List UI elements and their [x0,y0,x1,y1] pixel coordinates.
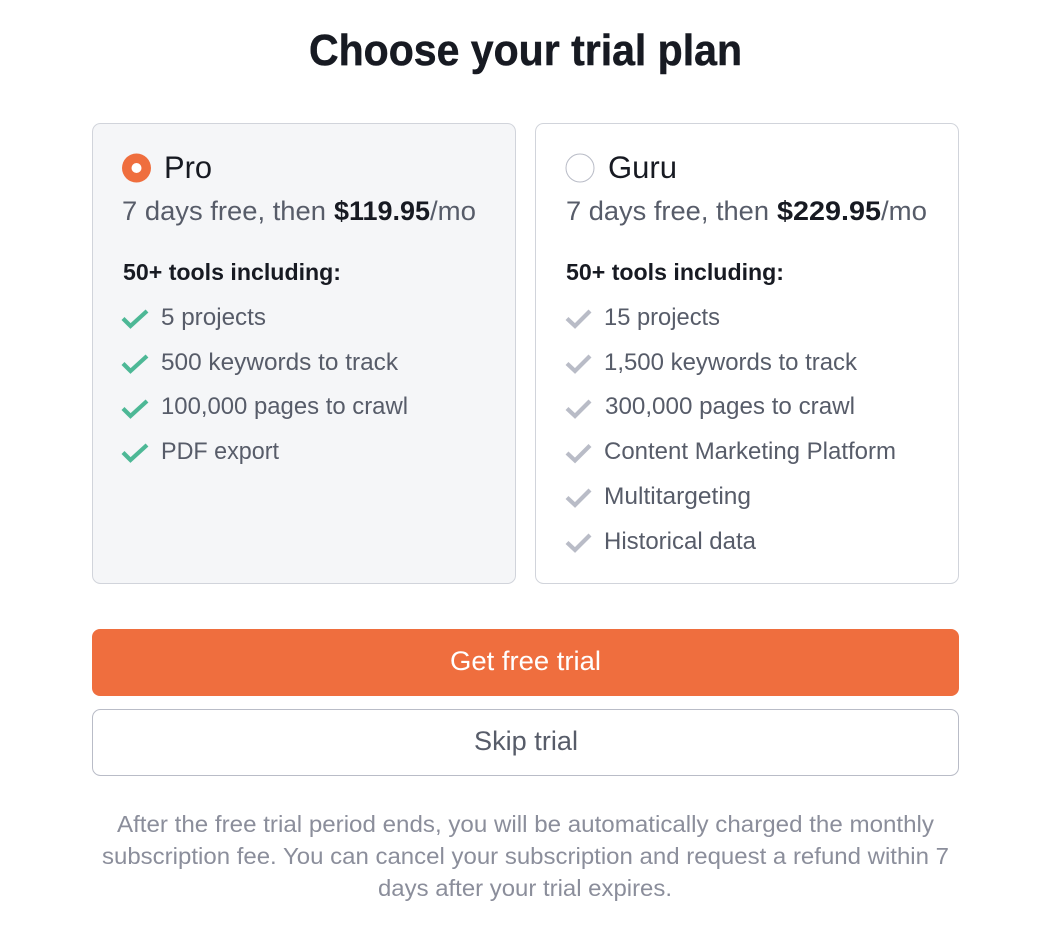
button: Get free trial [92,629,959,696]
Guru price line: 7 days free, then [566,196,769,226]
panel: Guru plan [536,124,958,584]
Pro price line: 7 days free, then [122,196,326,226]
feature: 15 projects: 15 projects [604,304,720,331]
Pro feature list [123,304,408,465]
feature: Content Marketing Platform: Content Marketing Platform [604,438,896,465]
Guru feature list [567,304,896,555]
feature: 5 projects: 5 projects [161,304,266,331]
button: Skip trial [92,710,958,776]
Guru card background [536,124,958,584]
Pro plan name: Pro [164,149,212,185]
disclaimer text: days after your trial expires. [378,875,672,901]
feature: Multitargeting: Multitargeting [604,483,751,510]
Pro list heading: 50+ tools including: [123,259,341,285]
icon: selected radio [122,154,151,182]
Pro card background [92,124,516,584]
feature: PDF export: PDF export [161,438,279,465]
button: Skip trial: Skip trial [474,726,578,756]
panel: Pro plan [92,124,516,584]
Guru price line: /mo [881,196,927,226]
disclaimer text: subscription fee. You can cancel your subscription and request a refund within 7 [102,843,949,869]
feature: Historical data: Historical data [604,528,757,555]
disclaimer text [102,811,949,901]
title: Choose your trial plan [309,26,742,75]
Guru price line: $229.95 [777,196,881,226]
feature: 300,000 pages: 300,000 pages to crawl [605,393,855,420]
feature: 500 keywords: 500 keywords to track [161,349,399,376]
Guru price line [566,196,927,226]
feature: 1,500 keywords: 1,500 keywords to track [604,349,858,376]
icon: unselected radio [566,154,594,182]
button: Get free trial: Get free trial [450,646,601,676]
Pro price line: $119.95 [334,196,430,226]
Guru plan name: Guru [608,149,677,185]
Pro price line: /mo [430,196,476,226]
disclaimer text: After the free trial period ends, you will be automatically charged the monthly [117,811,934,837]
Pro price line [122,196,476,226]
feature: 100,000 pages: 100,000 pages to crawl [161,393,408,420]
Guru list heading: 50+ tools including: [566,259,784,285]
